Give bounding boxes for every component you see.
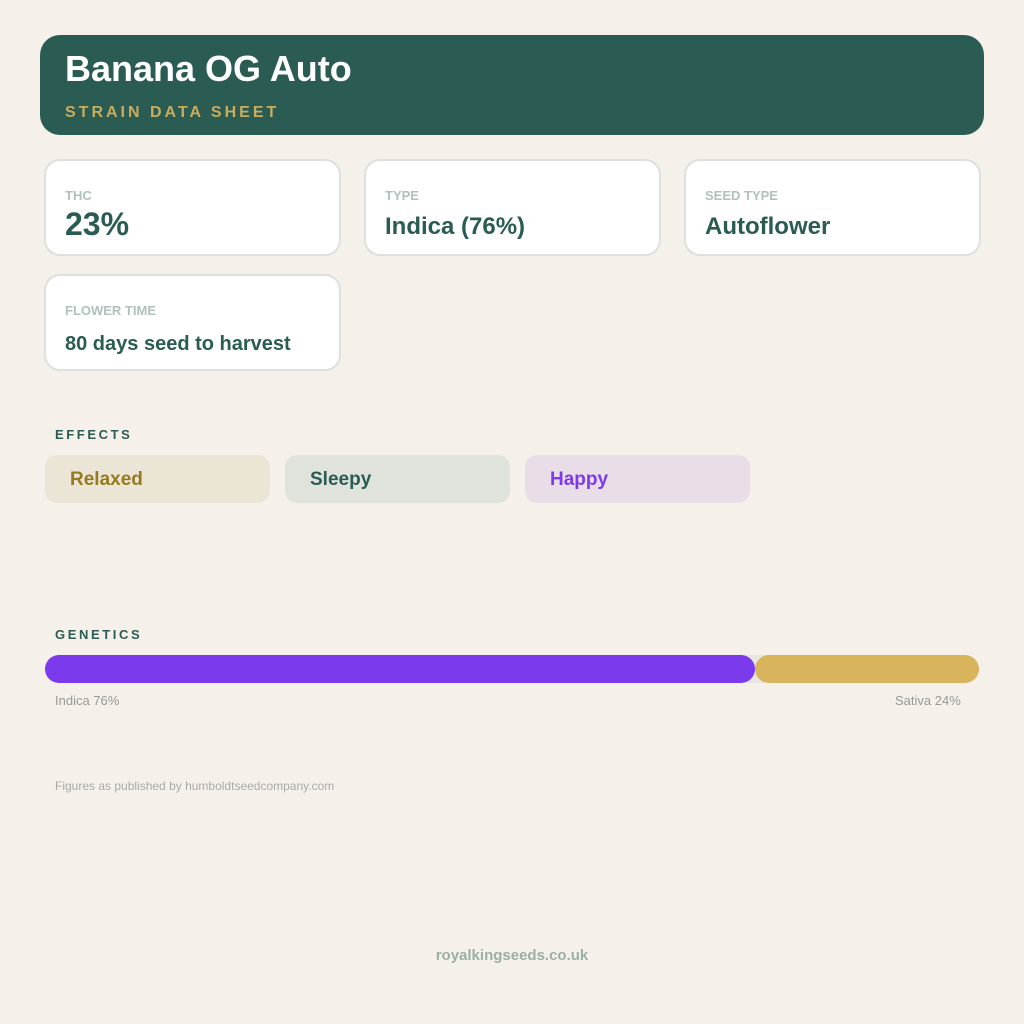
effects heading: EFFECTS (55, 427, 132, 442)
title: Banana OG Auto (65, 48, 352, 89)
indica segment (45, 655, 755, 683)
stat card: THC (44, 159, 341, 256)
effect pill: Relaxed (45, 455, 270, 503)
label: THC: THC (65, 188, 92, 203)
label: type: TYPE (385, 188, 419, 203)
effect pill: Sleepy (285, 455, 510, 503)
value: 80 days: 80 days seed to harvest (65, 333, 291, 355)
genetics bar (45, 655, 979, 683)
sativa segment (755, 655, 979, 683)
stat card: type (364, 159, 661, 256)
footer: royalkingseeds.co.uk (436, 947, 588, 964)
label: seed type: SEED TYPE (705, 188, 778, 203)
label: Indica share: Indica 76% (55, 693, 119, 708)
effect pill: Happy: Happy (550, 469, 608, 490)
value: Autoflower: Autoflower (705, 213, 830, 240)
stat card: flower time (44, 274, 341, 371)
value: Indica: Indica (76%) (385, 213, 525, 240)
stat card: seed type (684, 159, 981, 256)
label: Sativa share: Sativa 24% (895, 693, 961, 708)
genetics heading: GENETICS (55, 627, 142, 642)
effect pill: Sleepy: Sleepy (310, 469, 371, 490)
subtitle: STRAIN DATA SHEET (65, 104, 279, 121)
effect pill: Relaxed: Relaxed (70, 469, 143, 490)
value: 23%: 23% (65, 206, 129, 242)
effect pill: Happy (525, 455, 750, 503)
label: flower time: FLOWER TIME (65, 303, 156, 318)
header banner (40, 35, 984, 135)
source note: Figures as published by humboldtseedcompany.com (55, 779, 334, 793)
